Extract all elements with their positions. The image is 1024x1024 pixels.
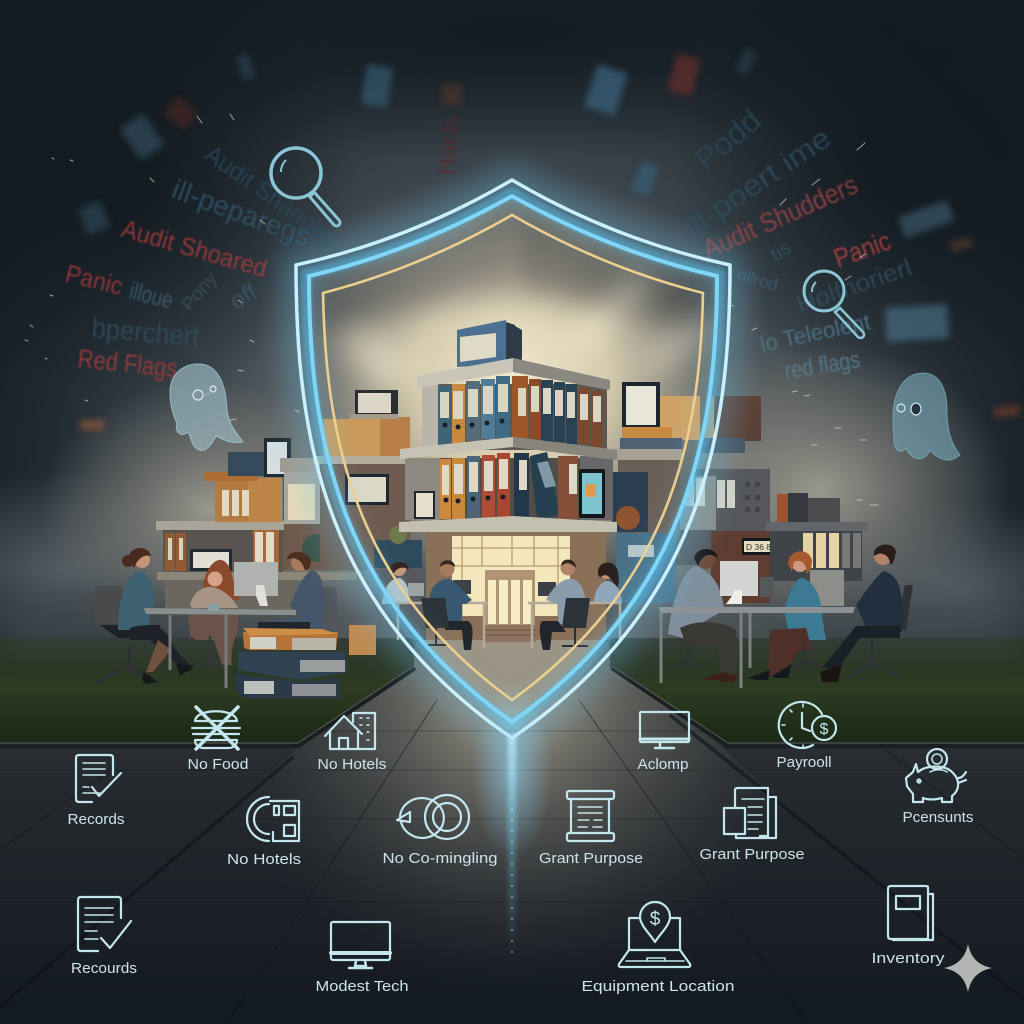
- sign: [742, 538, 776, 555]
- lawn: left: [0, 638, 414, 743]
- grey wall: [620, 465, 770, 565]
- woman: [382, 562, 410, 604]
- word: Holfnorierl: Holfnorierl: [793, 254, 915, 319]
- icon: checklist: [76, 755, 121, 802]
- teal crate: [612, 472, 648, 532]
- monitor: [720, 561, 774, 604]
- word: bperchert: bperchert: [90, 312, 201, 352]
- label: No Food: [188, 756, 248, 773]
- clouds in shield: [335, 270, 710, 390]
- icon group: No Co-mingling: [382, 795, 498, 867]
- icon: small monitor: [640, 712, 689, 748]
- top binder block: [457, 320, 522, 367]
- lit central walkway: [0, 640, 1024, 1024]
- label: Modest Tech: [316, 978, 408, 995]
- shield: [296, 180, 730, 738]
- word: Audit Shanges: Audit Shanges: [200, 140, 343, 252]
- binder stack: [236, 628, 348, 698]
- icon group: Records: [68, 755, 124, 828]
- lower wall: [163, 530, 283, 574]
- binders lower: [165, 533, 186, 571]
- lower binders: [440, 452, 578, 519]
- plant: [302, 534, 330, 562]
- right tablet: [622, 382, 660, 429]
- desk: [396, 603, 488, 648]
- table: [144, 608, 296, 688]
- window block: [284, 472, 322, 524]
- entrance door: [485, 570, 535, 625]
- label: Equipment Location: [582, 978, 734, 995]
- icon: desktop monitor: [331, 922, 390, 968]
- man: [540, 559, 590, 650]
- left tablet: [355, 390, 398, 416]
- corner wedge: [309, 196, 512, 330]
- left wall: [320, 459, 410, 569]
- man in blazer: [667, 549, 738, 682]
- word: Red Flags: Red Flags: [76, 343, 179, 383]
- left boxes: [323, 419, 380, 459]
- small frame: [414, 491, 435, 519]
- steps: [484, 625, 536, 642]
- icon: stacked documents: [724, 788, 776, 838]
- pale binders: [672, 476, 716, 530]
- icon group: Aclomp: [638, 712, 689, 773]
- icon group: Grant Purpose left: [539, 791, 643, 867]
- shield: middle blue ring: [309, 196, 717, 722]
- right team at table: [659, 544, 913, 688]
- kerbs and paving lines: [0, 666, 1024, 1024]
- interior floor: [424, 640, 600, 696]
- word: ollrod: ollrod: [735, 266, 780, 295]
- icon: laptop and money pin: [619, 902, 690, 967]
- wall display: [345, 474, 389, 505]
- centre-left team: [382, 560, 488, 650]
- right stack: [618, 458, 680, 558]
- central archive tower: [399, 320, 617, 642]
- label: No Hotels: [318, 756, 386, 773]
- right office block: [618, 382, 868, 606]
- cardboard archive: [215, 480, 281, 522]
- screen: [810, 570, 844, 606]
- word: Audit Shudders: Audit Shudders: [698, 170, 862, 264]
- icon: binder book: [888, 886, 933, 940]
- label: Records: [68, 811, 124, 828]
- label: Pcensunts: [902, 809, 974, 826]
- label: No Hotels: [227, 851, 301, 868]
- label: Grant Purpose: [539, 850, 643, 867]
- ground light streak: [472, 680, 552, 960]
- boxes top: [660, 396, 718, 440]
- word: Pony: Pony: [178, 268, 222, 315]
- wall monitor: [345, 474, 389, 505]
- plant shelf: [374, 540, 422, 568]
- word: illoue: illoue: [127, 278, 176, 314]
- icon: clock with coin: $: [820, 721, 829, 738]
- tablet in shelf: [579, 469, 605, 518]
- shield: outer white ring: [296, 180, 730, 738]
- word: lo Teleolent: lo Teleolent: [758, 308, 873, 357]
- table: [659, 607, 855, 688]
- right office block: D 36 8: [746, 542, 771, 552]
- upper wall: [422, 384, 607, 450]
- shield: inner gold ring: [323, 215, 703, 700]
- woman: [593, 562, 622, 604]
- stacked slab: [156, 521, 284, 530]
- word: off: off: [226, 279, 262, 315]
- icon: magnifier left: [271, 148, 340, 226]
- icon: checklist large: [78, 897, 131, 951]
- far shelf: [766, 522, 868, 531]
- icon: scroll: [567, 791, 614, 841]
- mug: [208, 604, 219, 611]
- desk: [528, 603, 620, 648]
- laptop: [408, 583, 424, 596]
- icon group: No Food: [188, 707, 248, 773]
- icon: magnifier right: [804, 271, 864, 338]
- seated woman teal: [748, 551, 826, 680]
- word: red flags: red flags: [783, 346, 862, 385]
- word: ill-peparegs: ill-peparegs: [168, 174, 315, 252]
- man: [421, 560, 473, 650]
- icon: house and hotel: [325, 713, 375, 749]
- monitor: [234, 562, 278, 606]
- parcel: [349, 625, 376, 655]
- shield glow halo: [298, 182, 728, 736]
- icon group: Inventory: [872, 886, 945, 967]
- label: Aclomp: [638, 756, 688, 773]
- label: Recourds: [71, 960, 137, 977]
- icon group: Pcensunts: [902, 749, 974, 826]
- icon group: Modest Tech: [316, 922, 408, 995]
- horizon fog: [0, 600, 1024, 650]
- flying paper streaks: [78, 49, 1021, 430]
- swirling words: left: [63, 114, 465, 383]
- icon group: No Hotels top: [318, 713, 386, 773]
- shield: blue glow: [306, 192, 720, 726]
- icon group: Recourds: [71, 897, 137, 977]
- left office block: [156, 438, 413, 610]
- icon: crossed burger: [192, 707, 240, 749]
- word: ill-poert ime: ill-poert ime: [678, 122, 837, 244]
- lawn: right: [610, 638, 1024, 743]
- ground plane: [0, 640, 1024, 1024]
- icon: interlocked rings: [397, 795, 469, 839]
- icon group: Grant Purpose right: [700, 788, 804, 863]
- word: Audit Shoared: Audit Shoared: [118, 215, 270, 283]
- storm clouds and fog: [0, 0, 1024, 680]
- swirling words: right: [678, 102, 915, 385]
- word: Panic: Panic: [830, 226, 895, 274]
- sparks and debris: [25, 114, 878, 505]
- word: tis: tis: [766, 237, 795, 266]
- tablet: [264, 438, 291, 477]
- icon: ghost right: [893, 373, 960, 460]
- icon group: Payrooll: [776, 702, 836, 771]
- seated man: [258, 552, 337, 632]
- lower slab: [399, 516, 617, 532]
- middle slab: [400, 437, 617, 460]
- label: Grant Purpose: [700, 846, 804, 863]
- lit window: [452, 536, 570, 616]
- icon group: Equipment Location: [582, 902, 734, 995]
- ground floor wall: [426, 532, 606, 640]
- left team at table: [95, 548, 376, 698]
- seated woman red hair: [188, 560, 240, 668]
- label: Payrooll: [776, 754, 832, 771]
- word: Podd: Podd: [687, 102, 768, 177]
- side blocks inside shield: [313, 382, 700, 603]
- icon: piggy bank: [906, 749, 966, 802]
- seated man suit: [820, 544, 913, 682]
- icon: ghost left: [170, 364, 243, 450]
- icon: ring and card: [247, 797, 299, 841]
- laptop: [538, 582, 556, 596]
- roof slab: [618, 452, 770, 469]
- shield interior backdrop: [311, 198, 714, 696]
- sparkle watermark: [944, 944, 992, 992]
- brown wall: [283, 470, 413, 570]
- tablet: [622, 382, 660, 429]
- word: Panic: Panic: [63, 260, 126, 301]
- lower wall: [405, 458, 613, 520]
- seated woman jacket: [95, 548, 194, 684]
- icon group: No Hotels middle: [227, 797, 301, 868]
- roof slab: [417, 358, 610, 390]
- brown crate: [711, 531, 770, 603]
- icon: laptop and money pin: $: [650, 909, 661, 930]
- centre-right team: [528, 559, 622, 650]
- label: No Co-mingling: [382, 850, 498, 867]
- word: Hacls: Hacls: [433, 114, 465, 177]
- upper binders: [438, 376, 602, 448]
- label: Inventory: [872, 950, 945, 967]
